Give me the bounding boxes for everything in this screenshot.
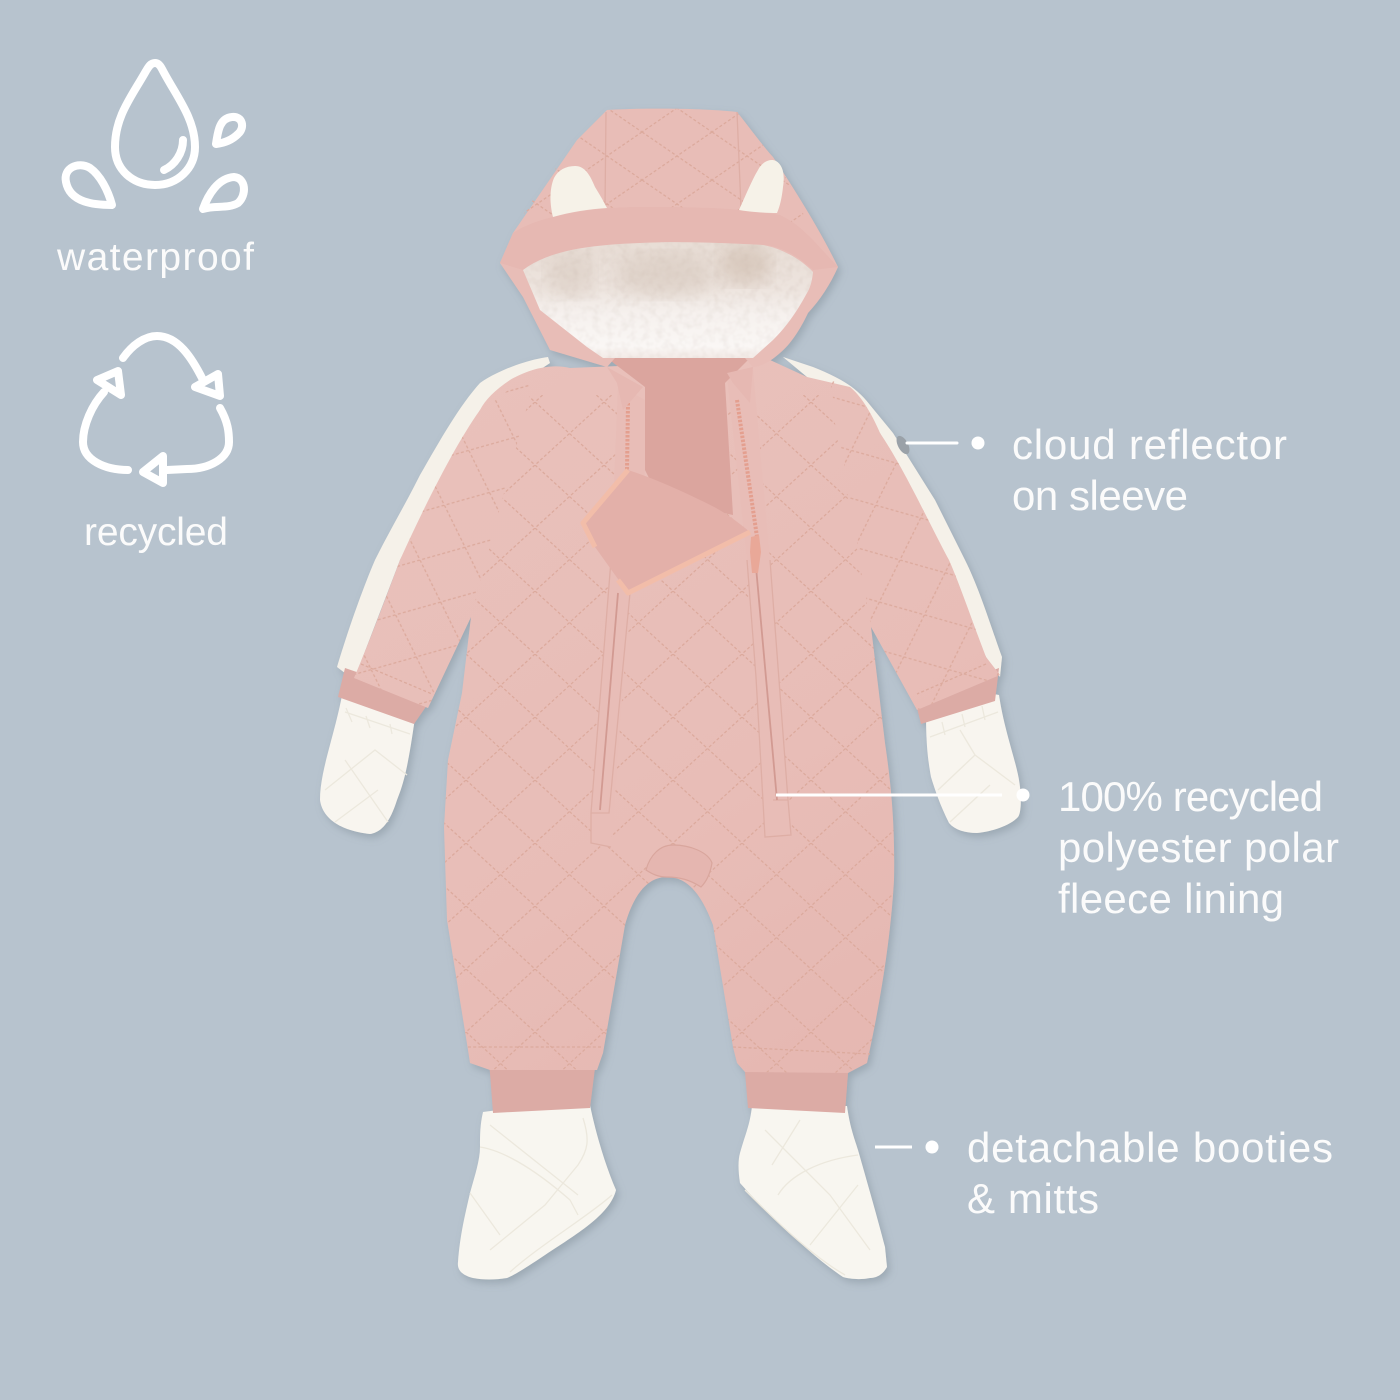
sherpa lining xyxy=(523,242,813,358)
bootie: left xyxy=(458,1105,616,1280)
leg hems xyxy=(361,664,986,1054)
icon: recycle arrows xyxy=(83,336,229,483)
leg cuff: right xyxy=(744,1060,849,1113)
product: pink quilted snowsuit xyxy=(320,105,1021,1280)
leader line xyxy=(776,794,1002,796)
hood centre panel seams xyxy=(605,112,741,208)
quilting: torso xyxy=(440,380,900,1080)
callout: cloud reflector xyxy=(894,421,1287,519)
quilting: left sleeve xyxy=(356,385,528,704)
text: recycled polyester: polyester polar xyxy=(1058,824,1339,871)
text: cloud reflector: cloud reflector xyxy=(1012,421,1287,468)
suit body with sleeves xyxy=(340,360,1005,1080)
recycled feature xyxy=(83,336,229,554)
beige lining shadows xyxy=(546,245,771,297)
left placket xyxy=(591,385,645,847)
callout: recycled lining xyxy=(776,773,1339,922)
label: waterproof: waterproof xyxy=(56,236,254,279)
zip: lower right slit xyxy=(756,567,777,800)
hood xyxy=(500,105,838,410)
zip: right xyxy=(737,400,757,537)
hood brim xyxy=(500,207,838,270)
ear: right xyxy=(739,160,784,213)
text: recycled polyester: 100% recycled xyxy=(1058,773,1323,820)
leader dot xyxy=(972,436,984,450)
waterproof feature xyxy=(56,63,254,279)
text: recycled polyester: fleece lining xyxy=(1058,875,1284,922)
cuff: left sleeve xyxy=(338,668,432,724)
mitt: right xyxy=(926,692,1021,833)
zip: lower left slit xyxy=(600,593,618,810)
crotch gusset xyxy=(646,845,712,887)
right placket xyxy=(727,370,791,837)
reflector marker xyxy=(894,434,912,456)
leader line xyxy=(875,1146,912,1148)
callout: detachable booties xyxy=(875,1124,1333,1222)
folded fleece flap with zip xyxy=(583,470,761,593)
leg cuff: left xyxy=(489,1060,596,1113)
flap zip edge xyxy=(583,470,750,593)
sleeve stripe: right xyxy=(783,357,1002,677)
text: booties and mitts: detachable booties xyxy=(967,1124,1333,1171)
leader dot xyxy=(1016,788,1030,802)
chest fleece panel xyxy=(607,358,750,515)
ear: left xyxy=(550,166,607,217)
hood quilting xyxy=(524,108,804,222)
placket seams xyxy=(591,560,791,847)
mitt: left xyxy=(320,690,416,834)
quilting: right sleeve xyxy=(831,381,999,710)
sleeve stripe: left xyxy=(337,357,550,680)
zip: upper left xyxy=(627,403,628,470)
bootie: right xyxy=(738,1106,887,1279)
cuff: right sleeve xyxy=(915,668,999,724)
lapel: right xyxy=(727,367,753,403)
text: booties and mitts: & mitts xyxy=(967,1175,1099,1222)
zip pull xyxy=(750,535,761,573)
label: recycled: recycled xyxy=(84,511,228,554)
leader line xyxy=(907,442,957,444)
icon: water drops xyxy=(66,63,244,209)
text: cloud reflector: on sleeve xyxy=(1012,472,1188,519)
leader dot xyxy=(926,1140,938,1154)
lapel: left xyxy=(607,367,643,410)
